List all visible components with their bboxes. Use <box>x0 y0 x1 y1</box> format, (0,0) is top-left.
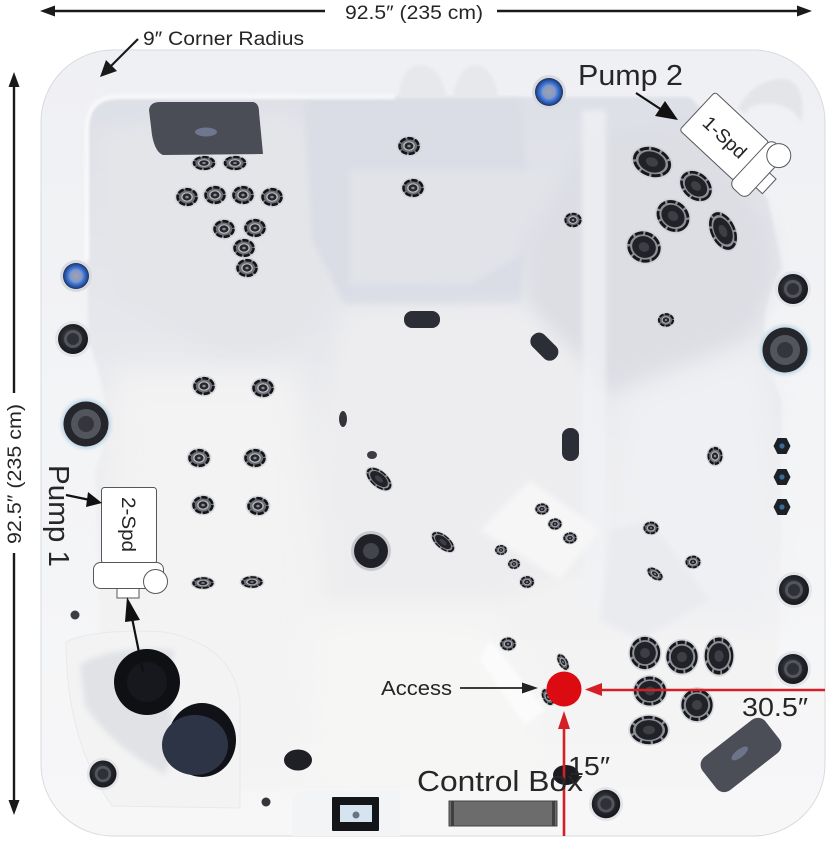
seat: top center <box>305 100 530 305</box>
corner radius label: 9″ Corner Radius <box>143 29 304 50</box>
control panel <box>292 791 400 836</box>
corner cup holder <box>738 79 803 122</box>
30.5 dimension arrow <box>585 683 825 696</box>
jets left seat <box>186 376 276 590</box>
valve jets left rim <box>55 321 111 449</box>
lounge base <box>110 370 315 780</box>
jets center <box>339 411 459 571</box>
headrest top left <box>149 102 263 155</box>
jets right seat <box>642 438 790 584</box>
height arrow top <box>8 72 20 393</box>
pump 2 diagram <box>675 85 797 205</box>
15 dimension arrow <box>558 711 570 836</box>
steps seat highlight <box>480 640 545 725</box>
centre highlight band <box>582 110 606 610</box>
blue light top <box>532 75 566 109</box>
pump 2 arrow <box>636 93 678 120</box>
15 label: 15″ <box>568 751 610 781</box>
jets right cluster top <box>563 139 745 328</box>
seat: right <box>620 340 775 620</box>
jets right cluster bottom <box>628 635 735 746</box>
dark pillows <box>404 311 579 461</box>
tub interior well <box>87 97 782 790</box>
width dimension label: 92.5″ (235 cm) <box>345 3 483 24</box>
pump 1 speed label: 2-Spd <box>117 497 138 552</box>
access arrow <box>460 682 538 694</box>
jets steps <box>494 502 578 589</box>
seat: top center step <box>350 170 575 285</box>
foot well <box>320 305 600 600</box>
inner rim highlight <box>87 97 395 260</box>
30.5 label: 30.5″ <box>742 692 808 722</box>
access point <box>546 672 582 706</box>
jets top left <box>174 155 284 278</box>
seat: top right <box>525 120 775 395</box>
filter recess <box>66 631 240 808</box>
filter recess shade <box>80 649 180 775</box>
access label: Access <box>381 678 452 700</box>
control box label: Control Box <box>417 766 584 798</box>
control box <box>449 801 557 826</box>
blue light left <box>60 260 92 292</box>
pump 1 diagram <box>94 488 168 598</box>
valve jets right rim <box>760 271 812 687</box>
lower seat <box>310 620 540 780</box>
top rim notches <box>398 65 499 97</box>
height dimension label: 92.5″ (235 cm) <box>5 404 26 544</box>
headrest bottom right <box>697 714 785 796</box>
bottom rim jets <box>70 610 623 821</box>
corner radius arrow <box>100 39 138 77</box>
jets access area <box>499 636 573 709</box>
filter canister 2 <box>162 703 236 777</box>
pump 1 label: Pump 1 <box>42 465 74 567</box>
pump 1 arrow <box>66 492 102 507</box>
seat: top left <box>100 110 335 363</box>
filter canister 1 <box>114 649 180 715</box>
pump 1 to filter arrow <box>125 597 143 672</box>
pump 2 label: Pump 2 <box>578 60 683 92</box>
pump 2 speed label: 1-Spd <box>698 113 750 163</box>
right seat wedge <box>600 520 710 640</box>
width arrow left <box>40 6 325 16</box>
height arrow bottom <box>8 553 20 815</box>
jets top center <box>396 136 426 198</box>
width arrow right <box>497 6 812 16</box>
